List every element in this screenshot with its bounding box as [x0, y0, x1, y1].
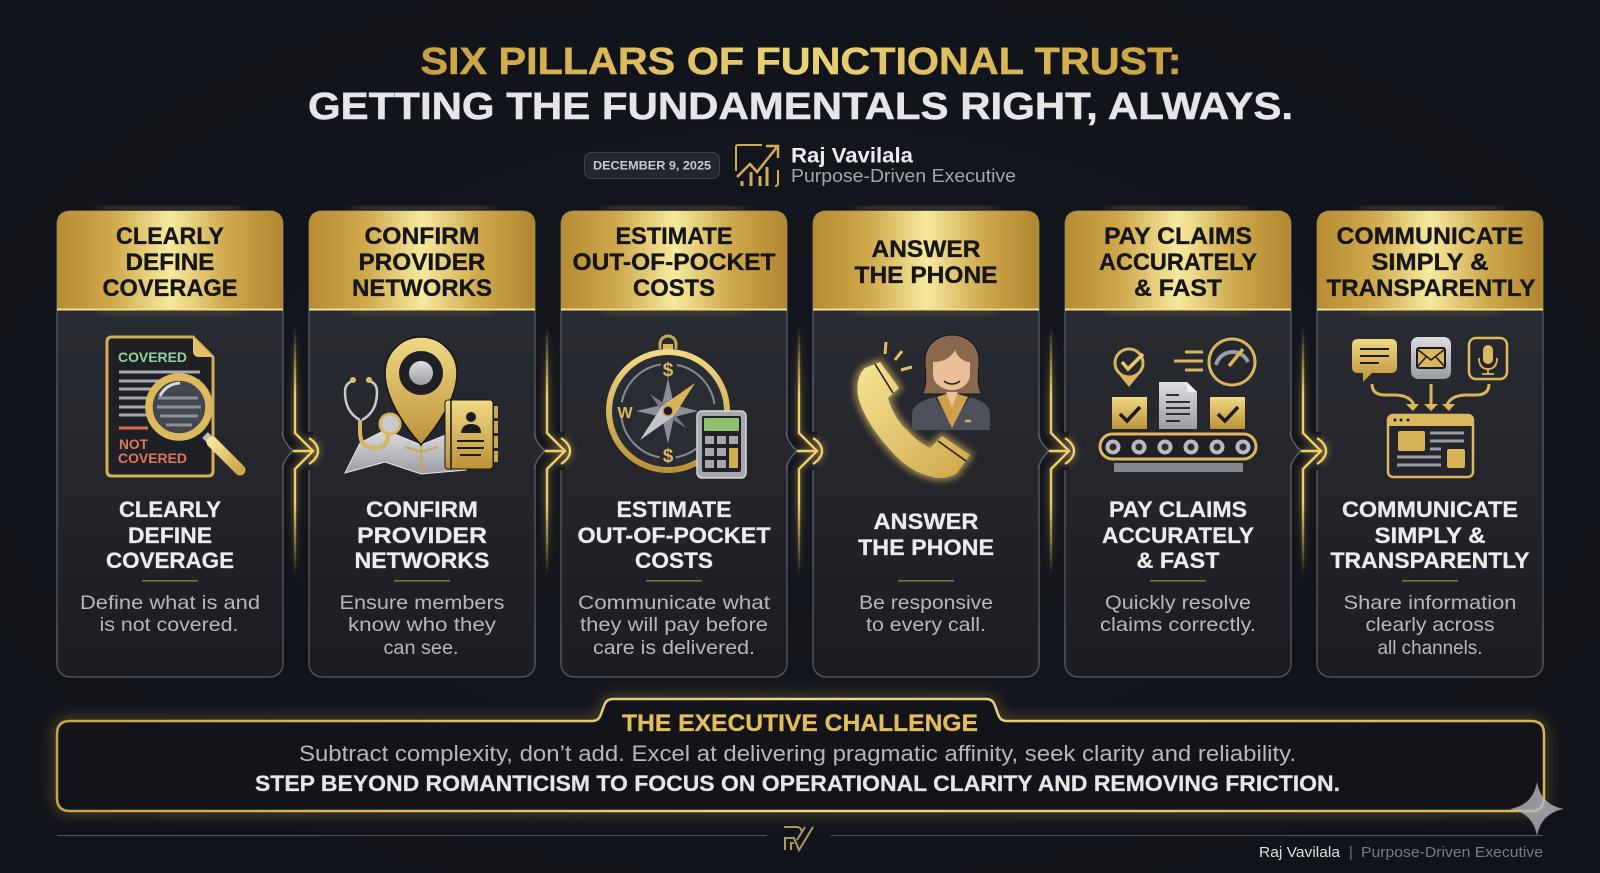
- footer credit: Purpose-Driven Executive: [1361, 845, 1543, 861]
- body heading: PROVIDER: [357, 523, 487, 548]
- description: Communicate what: [578, 592, 771, 614]
- icon: telephone and agent: [857, 335, 990, 478]
- icon: compass and calculator: $: [663, 446, 674, 467]
- description: care is delivered.: [593, 637, 755, 659]
- arrow: connector 4: [1038, 327, 1074, 575]
- footer credit: |: [1349, 845, 1353, 861]
- description: Be responsive: [859, 592, 993, 614]
- header band: [309, 211, 535, 310]
- body heading: [354, 497, 490, 573]
- description: [80, 592, 260, 636]
- callout text: STEP BEYOND ROMANTICISM TO FOCUS ON OPERATIONAL CLARITY AND REMOVING FRICTION.: [255, 771, 1340, 796]
- description: Quickly resolve: [1105, 592, 1251, 614]
- icon: channels flowing into a web page: [1352, 337, 1507, 477]
- author name and role: Purpose-Driven Executive: [791, 166, 1016, 186]
- header band: PAY CLAIMS: [1104, 223, 1252, 250]
- callout text: Subtract complexity, don’t add. Excel at delivering pragmatic affinity, seek clarity and reliability.: [299, 741, 1296, 766]
- icon: coverage document with magnifier: [107, 337, 240, 476]
- header band: ESTIMATE: [616, 223, 732, 250]
- title: GETTING THE FUNDAMENTALS RIGHT, ALWAYS.: [308, 86, 1293, 128]
- header band: [813, 211, 1039, 310]
- body heading: NETWORKS: [354, 548, 490, 573]
- panel: pay claims accurately and fast: [1065, 211, 1291, 677]
- body heading: [1102, 497, 1254, 573]
- description: know who they: [348, 614, 496, 636]
- description: [578, 592, 771, 659]
- date badge: DECEMBER 9, 2025: [593, 158, 711, 172]
- description: can see.: [384, 637, 458, 659]
- description: Ensure members: [340, 592, 505, 614]
- body heading: [858, 509, 994, 560]
- arrow: connector 1: [282, 327, 318, 575]
- body heading: COMMUNICATE: [1342, 497, 1518, 522]
- header band: THE PHONE: [854, 262, 998, 289]
- body heading: [578, 497, 771, 573]
- body heading: SIMPLY &: [1374, 523, 1486, 548]
- icon: map pin, stethoscope and directory: [345, 337, 498, 474]
- body heading: & FAST: [1136, 548, 1220, 573]
- glow above cards: [100, 207, 1500, 212]
- description: Share information: [1344, 592, 1516, 614]
- header band: CLEARLY: [116, 223, 224, 250]
- footer rule: [57, 834, 1543, 836]
- header band: NETWORKS: [352, 275, 492, 302]
- author name and role: Raj Vavilala: [791, 144, 913, 168]
- icon: coverage document with magnifier: COVERED: [118, 349, 187, 365]
- panel: answer the phone: [813, 211, 1039, 677]
- body heading: OUT-OF-POCKET: [578, 523, 771, 548]
- body heading: CLEARLY: [119, 497, 221, 522]
- description: claims correctly.: [1100, 614, 1256, 636]
- header band: SIMPLY &: [1372, 249, 1488, 276]
- panel: estimate out-of-pocket costs: [561, 211, 787, 677]
- description: [859, 592, 993, 636]
- author name and role: [791, 144, 1016, 186]
- header band: PROVIDER: [358, 249, 486, 276]
- body heading: THE PHONE: [858, 535, 994, 560]
- callout: the executive challenge: [57, 699, 1544, 811]
- body heading: TRANSPARENTLY: [1330, 548, 1530, 573]
- body heading: DEFINE: [128, 523, 212, 548]
- header band: TRANSPARENTLY: [1326, 275, 1536, 302]
- description: Define what is and: [80, 592, 260, 614]
- panel: clearly define coverage: [57, 211, 283, 677]
- title: SIX PILLARS OF FUNCTIONAL TRUST:: [420, 41, 1182, 83]
- header band: OUT-OF-POCKET: [572, 249, 776, 276]
- footer credit: [1259, 845, 1543, 861]
- description: all channels.: [1378, 637, 1482, 659]
- date badge: [584, 152, 720, 178]
- arrow: connector 5: [1290, 327, 1326, 575]
- icon: compass and calculator: W: [617, 405, 633, 422]
- description: clearly across: [1366, 614, 1495, 636]
- icon: RV monogram: [784, 827, 813, 850]
- header band: [1065, 211, 1291, 310]
- description: to every call.: [866, 614, 986, 636]
- header band: [57, 211, 283, 310]
- arrow: connector 2: [534, 327, 570, 575]
- body heading: ESTIMATE: [616, 497, 732, 522]
- body heading: PAY CLAIMS: [1109, 497, 1247, 522]
- icon: sparkle star: [1510, 782, 1564, 836]
- callout text: [255, 741, 1340, 796]
- body heading: [106, 497, 234, 573]
- header band: COMMUNICATE: [1336, 223, 1524, 250]
- header band: ACCURATELY: [1099, 249, 1257, 276]
- footer credit: Raj Vavilala: [1259, 845, 1341, 861]
- icon: compass and calculator: $: [663, 360, 674, 381]
- description: is not covered.: [100, 614, 238, 636]
- icon: coverage document with magnifier: COVERED: [118, 450, 187, 466]
- body heading: [1330, 497, 1530, 573]
- header band: ANSWER: [872, 236, 980, 263]
- body heading: CONFIRM: [366, 497, 478, 522]
- body heading: ANSWER: [874, 509, 979, 534]
- header band: [1317, 211, 1543, 310]
- body heading: ACCURATELY: [1102, 523, 1254, 548]
- body heading: COVERAGE: [106, 548, 234, 573]
- callout heading: THE EXECUTIVE CHALLENGE: [622, 710, 978, 737]
- header band: [561, 211, 787, 310]
- arrow: connector 3: [786, 327, 822, 575]
- icon: author growth chart logo: [736, 145, 778, 186]
- description: [1100, 592, 1256, 636]
- panel: communicate simply and transparently: [1317, 211, 1543, 677]
- icon: compass and calculator: [609, 336, 746, 478]
- description: [340, 592, 505, 659]
- icon: claims conveyor: [1100, 339, 1256, 472]
- header band: & FAST: [1134, 275, 1222, 302]
- description: [1344, 592, 1516, 659]
- title: [308, 41, 1293, 128]
- description: they will pay before: [580, 614, 768, 636]
- header band: COVERAGE: [102, 275, 238, 302]
- header band: COSTS: [633, 275, 715, 302]
- header band: CONFIRM: [364, 223, 480, 250]
- panel: confirm provider networks: [309, 211, 535, 677]
- header band: DEFINE: [126, 249, 214, 276]
- body heading: COSTS: [635, 548, 713, 573]
- icon: coverage document with magnifier: NOT: [119, 436, 148, 452]
- glow below card headers: [100, 311, 1500, 315]
